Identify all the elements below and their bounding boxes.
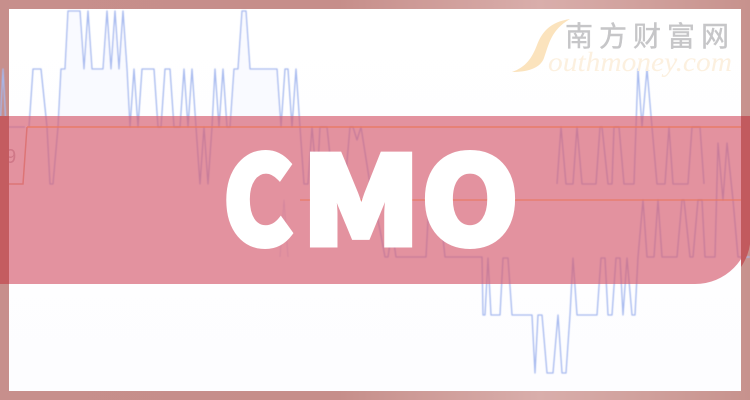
logo swoosh	[512, 19, 570, 72]
orange reference lines	[27, 127, 741, 200]
logo domain: outhmoney.com	[548, 47, 732, 77]
title: CMO: C	[223, 104, 293, 281]
title: CMO	[223, 104, 519, 281]
band over left frame	[0, 116, 9, 284]
logo chinese name: 南方财富网	[565, 15, 735, 55]
red title band	[0, 116, 750, 284]
logo: southmoney	[512, 15, 735, 77]
orange axis step line	[0, 127, 27, 184]
band over right frame	[741, 116, 750, 267]
title: CMO: O	[421, 104, 519, 281]
title: CMO: M	[301, 104, 421, 281]
